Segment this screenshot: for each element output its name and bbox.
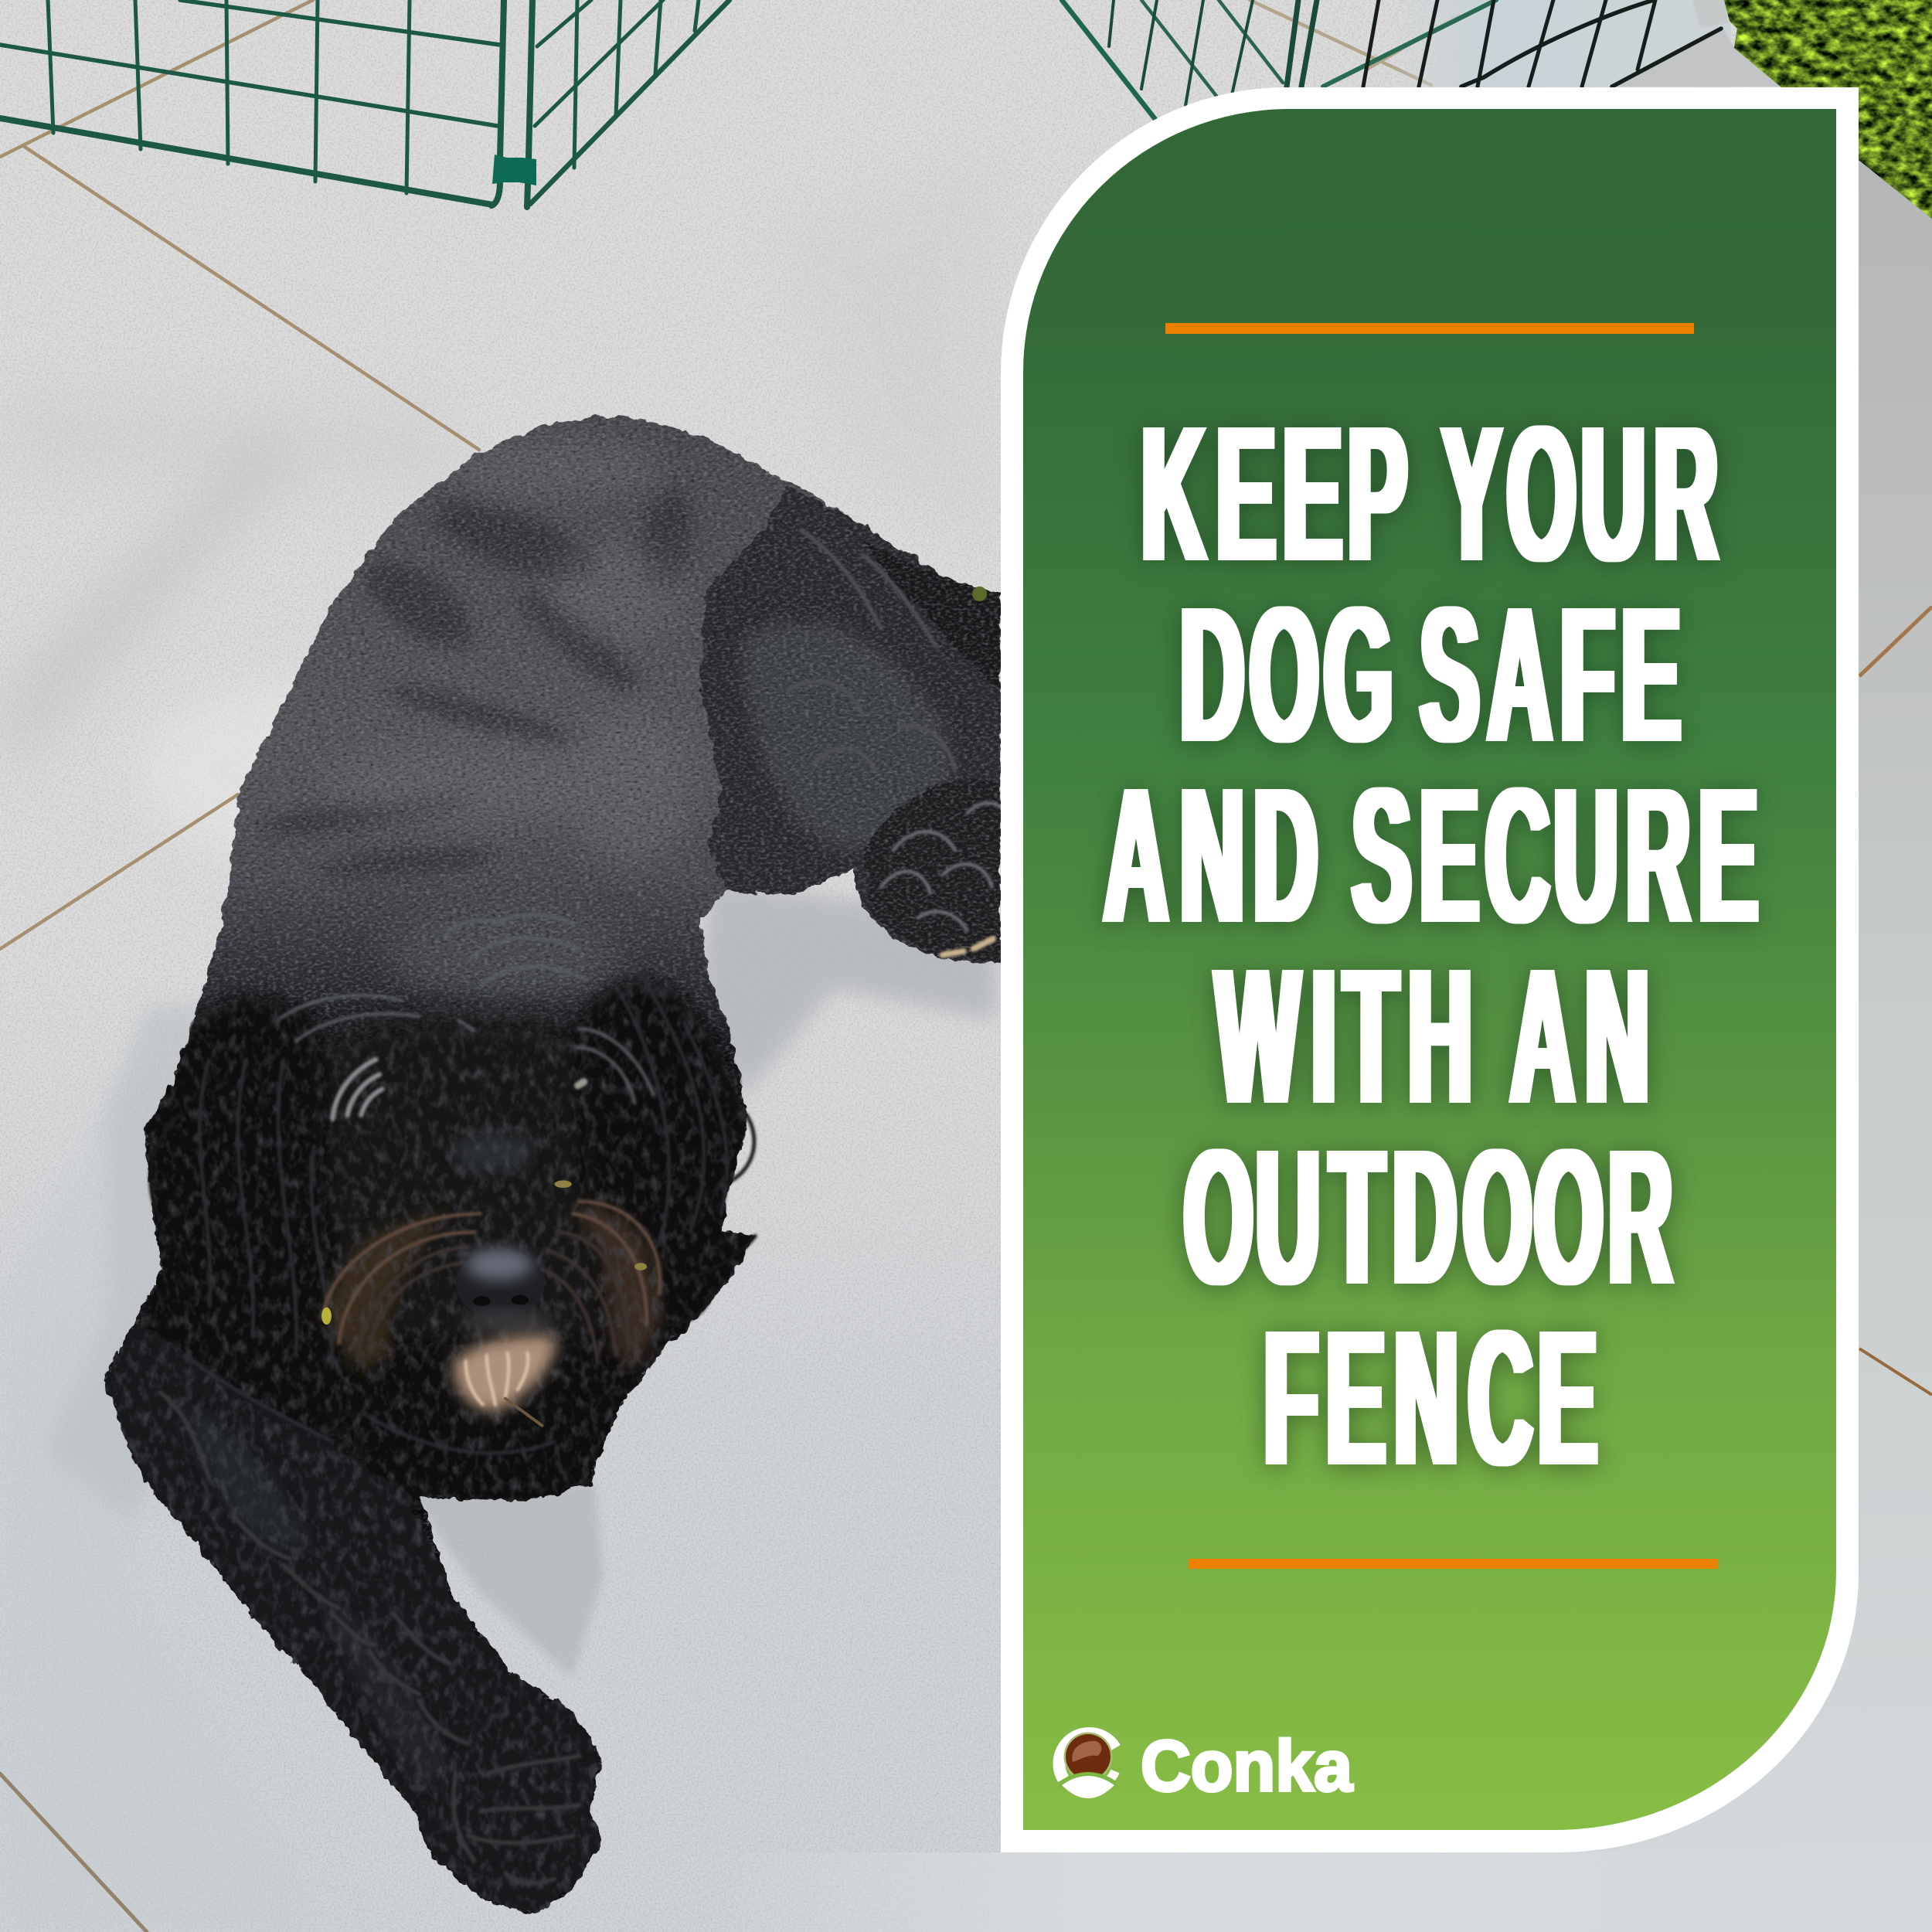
divider: bottom orange line — [1189, 1559, 1718, 1569]
light eyebrow strands — [332, 1060, 382, 1119]
background: wall and tile on right edge — [1391, 0, 1932, 1932]
title line: dog safe: DOG — [1180, 567, 1393, 783]
muzzle brown patches — [325, 1217, 450, 1368]
title line: dog safe — [1180, 567, 1681, 783]
title line: with an: AN — [1510, 929, 1649, 1145]
title line: keep your — [1141, 386, 1718, 602]
front leg strands — [160, 1393, 579, 1883]
grass debris on fur — [321, 587, 987, 1325]
dog head and front leg fur — [105, 981, 770, 1913]
title line: and secure: AND — [1104, 748, 1318, 964]
title line: and secure — [1104, 748, 1758, 964]
hind thigh highlights — [258, 437, 1001, 1004]
title line: and secure: SECURE — [1352, 748, 1758, 964]
muzzle bridge — [451, 1132, 535, 1172]
title line: keep your: KEEP — [1141, 386, 1407, 602]
paw toes — [943, 939, 993, 955]
wire fence side panel — [530, 0, 730, 204]
forehead — [388, 893, 622, 1004]
forehead strands — [281, 915, 653, 1103]
ears — [135, 981, 770, 1509]
hind leg — [700, 487, 1001, 964]
forearm — [105, 1318, 604, 1913]
dog beard — [452, 1335, 557, 1426]
wire fence left panel — [0, 0, 532, 207]
hind paw curls — [881, 803, 1001, 930]
tile joints — [0, 0, 1459, 1932]
divider: top orange line — [1165, 323, 1694, 334]
back light patches — [321, 437, 690, 862]
logo wordmark: Conka — [1141, 1726, 1353, 1806]
dog nose — [456, 1248, 554, 1331]
title line: outdoor: OUTDOOR — [1184, 1110, 1672, 1325]
face base — [284, 1016, 653, 1499]
ear strands — [185, 974, 727, 1453]
fence connector clip — [492, 155, 536, 185]
title line: with an — [1216, 929, 1649, 1145]
title line: keep your: YOUR — [1442, 386, 1718, 602]
logo: Conka — [1059, 1726, 1353, 1806]
panel: green gradient — [1023, 109, 1836, 1830]
title line: dog safe: SAFE — [1420, 567, 1681, 783]
back dark patches — [258, 487, 699, 881]
grass at top right — [1724, 0, 1932, 219]
muzzle brown strands — [323, 1202, 660, 1343]
dog photo — [102, 417, 1001, 1913]
title line: fence: FENCE — [1264, 1291, 1597, 1506]
stray hairs — [151, 1115, 755, 1325]
dog silhouette — [102, 417, 1001, 1913]
hair strands — [151, 530, 1001, 1883]
title line: with an: WITH — [1216, 929, 1472, 1145]
dog fur body — [102, 417, 1001, 1913]
dog shadow on floor — [46, 881, 997, 1677]
title — [1104, 386, 1758, 1506]
wire fence far panels — [1062, 0, 1721, 121]
logo icon — [1059, 1733, 1117, 1798]
panel: white border — [1001, 87, 1859, 1852]
